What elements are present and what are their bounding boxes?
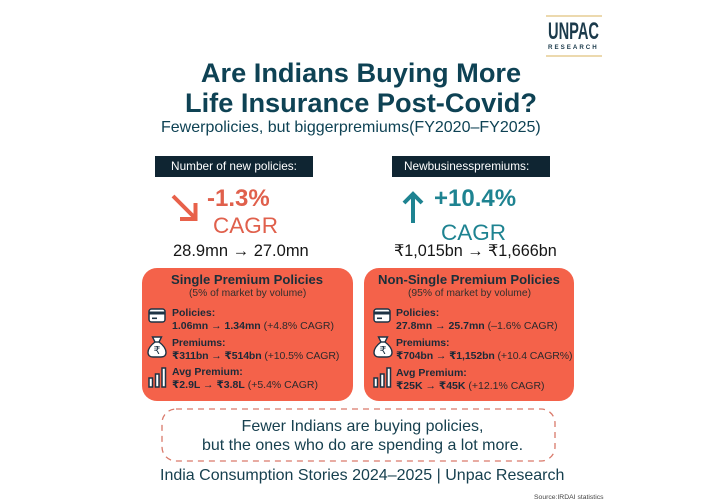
stat: +10.4% CAGR: +10.4% bbox=[434, 185, 516, 212]
text: avg premium bbox=[396, 367, 545, 392]
label: new business premiums bbox=[392, 156, 550, 177]
footer line: India Consumption Stories 2024–2025 | Unpac Research bbox=[160, 467, 564, 484]
text: premiums: Premiums: bbox=[172, 337, 225, 349]
callout bbox=[161, 408, 556, 462]
text: premiums: ₹311bn → ₹514bn (+10.5% CAGR) bbox=[172, 350, 339, 362]
text: policies bbox=[396, 307, 558, 332]
callout: Fewer Indians are buying policies, bbox=[242, 418, 483, 435]
icon: money bag bbox=[373, 336, 393, 358]
text: policies: 1.06mn → 1.34mn (+4.8% CAGR) bbox=[172, 320, 334, 332]
icon: bars bbox=[373, 367, 392, 388]
title: Are Indians Buying More bbox=[201, 57, 521, 88]
heading: single premium: Single Premium Policies bbox=[171, 272, 323, 287]
label: number of new policies: Number of new policies: bbox=[171, 159, 297, 173]
icon: money bag: ₹ bbox=[380, 345, 386, 357]
logo: Unpac Research: UNPAC bbox=[548, 18, 599, 45]
logo: Unpac Research: RESEARCH bbox=[548, 44, 599, 50]
icon: card bbox=[148, 308, 166, 323]
title: Life Insurance Post-Covid? bbox=[185, 87, 537, 118]
note: market share: (95% of market by volume) bbox=[408, 288, 531, 299]
stat: +10.4% CAGR bbox=[434, 185, 516, 245]
text: premiums: ₹704bn → ₹1,152bn (+10.4 CAGR%) bbox=[396, 350, 572, 362]
stat: -1.3% CAGR bbox=[207, 185, 278, 238]
stat: +10.4% CAGR: CAGR bbox=[441, 220, 506, 245]
callout: but the ones who do are spending a lot more. bbox=[202, 437, 523, 454]
icon: up arrow bbox=[402, 191, 424, 223]
text: policies bbox=[172, 307, 334, 332]
icon: down arrow bbox=[172, 194, 198, 221]
text: premiums bbox=[396, 337, 572, 362]
text: premiums: Premiums: bbox=[396, 337, 449, 349]
text: avg premium: ₹2.9L → ₹3.8L (+5.4% CAGR) bbox=[172, 379, 318, 391]
label: new business premiums: Newbusinesspremiums: bbox=[404, 159, 529, 173]
text: avg premium bbox=[172, 366, 318, 391]
icon: bars bbox=[148, 367, 166, 388]
label: number of new policies bbox=[155, 156, 313, 177]
icon: card bbox=[373, 308, 391, 323]
text: avg premium: ₹25K → ₹45K (+12.1% CAGR) bbox=[396, 380, 545, 392]
heading: non-single premium: Non-Single Premium Policies bbox=[378, 272, 560, 287]
stat: -1.3% CAGR: CAGR bbox=[213, 213, 278, 238]
stat: -1.3% CAGR: -1.3% bbox=[207, 185, 270, 212]
note: market share: (5% of market by volume) bbox=[189, 288, 306, 299]
text: premiums bbox=[172, 337, 339, 362]
title bbox=[185, 57, 537, 118]
subtitle: Fewerpolicies, but biggerpremiums(FY2020–FY2025) bbox=[161, 119, 541, 136]
text: policies: Policies: bbox=[172, 307, 215, 319]
icon: money bag bbox=[147, 336, 167, 358]
source: Source:IRDAI statistics bbox=[534, 494, 604, 500]
panel: non-single premium policies bbox=[364, 268, 574, 401]
text: avg premium: Avg Premium: bbox=[172, 366, 243, 378]
policy range: 28.9mn → 27.0mn bbox=[173, 242, 309, 260]
text: avg premium: Avg Premium: bbox=[396, 367, 467, 379]
panel: single premium policies bbox=[142, 268, 353, 401]
logo: Unpac Research bbox=[546, 15, 602, 57]
premium range: ₹1,015bn → ₹1,666bn bbox=[394, 242, 557, 260]
text: policies: 27.8mn → 25.7mn (–1.6% CAGR) bbox=[396, 320, 558, 332]
text: policies: Policies: bbox=[396, 307, 439, 319]
icon: money bag: ₹ bbox=[154, 345, 160, 357]
